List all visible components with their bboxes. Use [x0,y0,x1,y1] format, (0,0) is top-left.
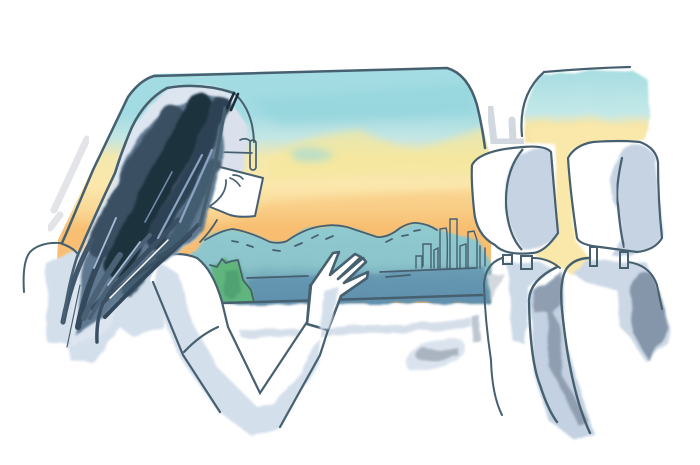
panel: main car window view [50,66,495,306]
wash: streak below window [240,318,472,338]
rear window wash [524,70,650,142]
rear window yellow band [530,125,645,275]
hair outline [63,86,238,322]
arm lines [153,254,328,427]
hand [307,252,368,330]
sleeve and arm wash [153,263,320,435]
hair highlights [94,150,212,298]
headrest [568,141,664,256]
seat shoulder wash [505,262,552,345]
shoulder white [150,254,330,410]
rear window frame [521,67,630,136]
body wash: lower back [46,250,163,363]
city skyline [416,219,485,268]
bush shadow [224,268,240,300]
hair [63,85,238,347]
hills and water [188,223,492,305]
hair lower strands [63,220,198,347]
left seat [24,243,88,292]
bush [210,257,254,304]
hair base [70,85,234,345]
illustration: woman in a mask looking out of a car window at a sunset city [22,66,672,440]
wash: grey streaks by pillar [490,108,522,142]
panel: rear window [521,67,650,275]
hair mid tone [75,98,228,335]
head outline [234,93,254,142]
seat wash middle [530,270,593,438]
headrest [472,147,558,254]
seat dark wash middle [534,272,587,425]
neck line [200,220,217,242]
face wash [215,100,247,205]
wash: pillar block [472,316,481,343]
sky wash [50,66,495,306]
seat edge grey wash [487,272,503,300]
glasses [210,139,256,206]
hill ridge and water lines [205,223,476,302]
window frame outline [62,68,485,303]
seat outlines [561,247,662,433]
hair dark strands [100,105,222,290]
seat left: headrest and back [472,147,593,438]
wash: grey streak left of window [50,139,87,228]
icon: door handle [407,337,466,372]
woman [24,85,670,438]
seat wash right [573,260,670,363]
seat dark wash right [630,272,668,362]
seat outlines [484,255,560,422]
seat right: headrest and back [561,141,670,433]
water bands [248,268,487,303]
mask [208,166,263,217]
